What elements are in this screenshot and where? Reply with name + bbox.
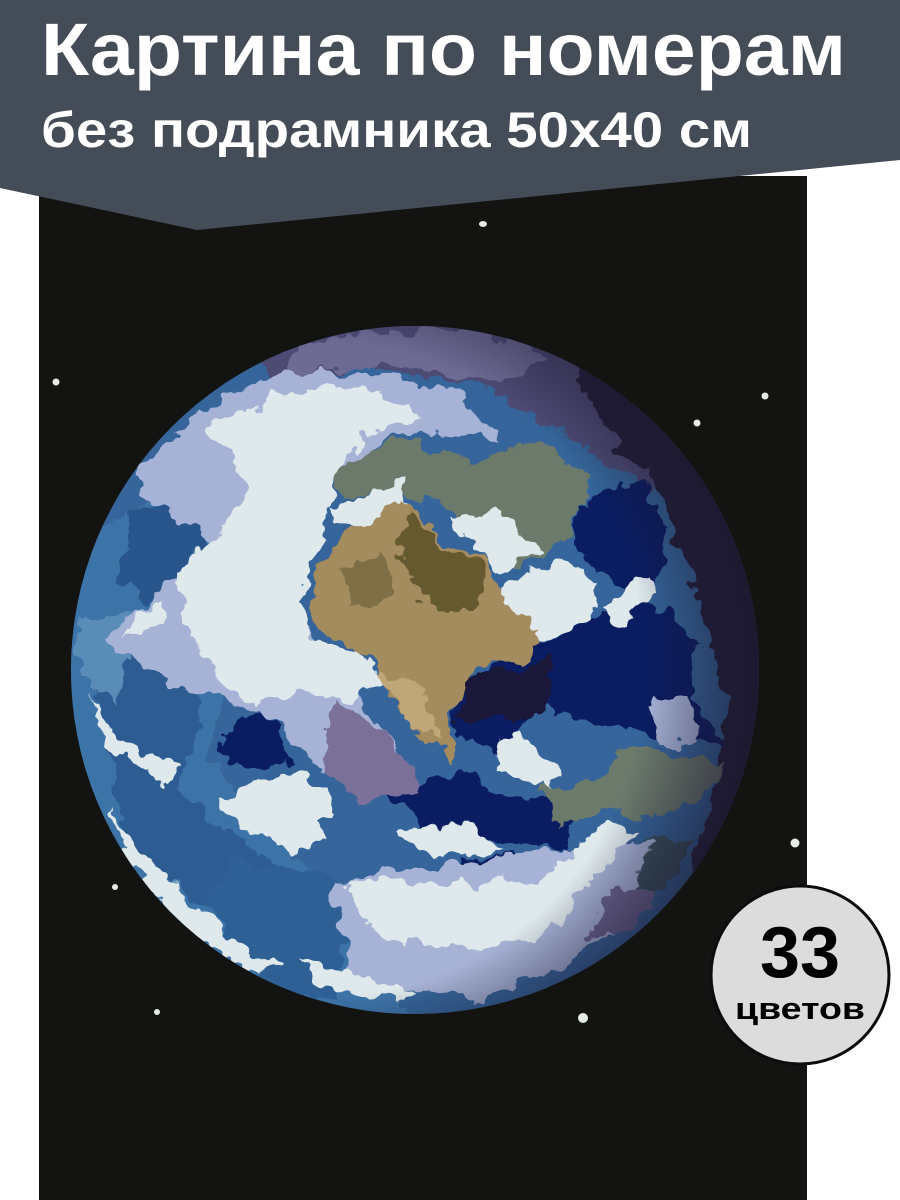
badge number: 33 (760, 913, 840, 993)
white clouds (90, 390, 660, 1000)
title banner (0, 0, 900, 230)
subtitle: без подрамника 50х40 см (41, 102, 752, 158)
ocean mid tones (71, 500, 410, 1014)
deep navy ocean (220, 455, 725, 875)
dark ocean gulf (458, 660, 550, 722)
dark slate land (635, 835, 694, 892)
painting background (39, 176, 807, 1200)
earth globe (60, 310, 780, 1030)
lavender cloud haze (100, 370, 700, 1000)
terminator shading (345, 326, 759, 1014)
badge: 33 colours (711, 886, 889, 1064)
badge label: цветов (735, 991, 865, 1026)
stars (52, 221, 800, 1023)
purple shadow patch (325, 700, 420, 800)
title: Картина по номерам (41, 8, 846, 91)
purple cap and night side (261, 326, 759, 872)
grey green land (330, 440, 725, 830)
tan north america (310, 500, 540, 760)
